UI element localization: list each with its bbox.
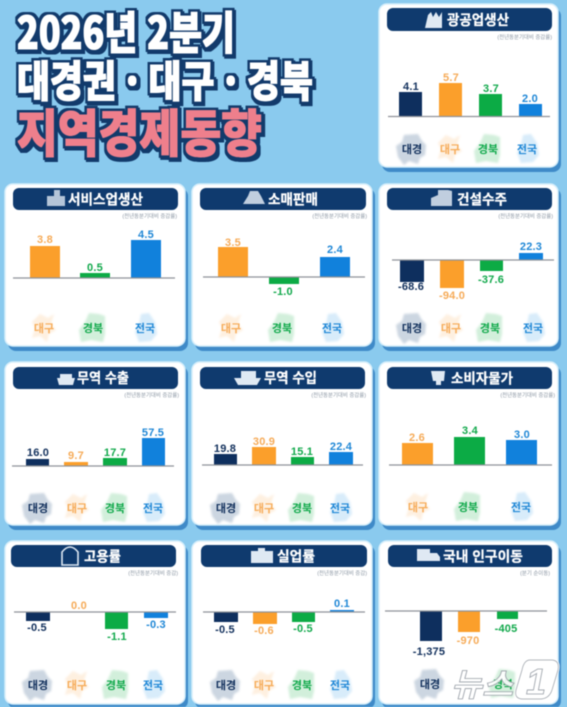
heading: 소비자물가 — [387, 367, 552, 389]
bar chart — [389, 425, 552, 465]
region labels: 대경 — [216, 677, 236, 693]
region labels: 경북 — [106, 677, 126, 693]
heading: 실업률: 실업률 — [277, 546, 315, 566]
region labels — [396, 134, 539, 165]
region labels — [396, 313, 545, 344]
bar chart — [385, 611, 547, 658]
region labels: 경북 — [458, 499, 478, 515]
bar chart: 3.5 — [225, 237, 241, 249]
panel: 소비자물가 — [379, 362, 561, 530]
region labels: 대구 — [441, 320, 461, 336]
bar chart: 3.7 — [483, 83, 499, 95]
bar chart: 3.4 — [462, 425, 479, 437]
basis note: (전년동분기대비 증감률) — [124, 391, 179, 399]
heading: 서비스업생산: 서비스업생산 — [68, 190, 143, 210]
region labels: 대구 — [221, 320, 241, 336]
heading: 고용률: 고용률 — [84, 546, 121, 566]
bar chart: -0.5 — [215, 624, 235, 636]
bar chart: 17.7 — [104, 447, 126, 459]
watermark: 뉴스1 — [451, 660, 558, 703]
region labels — [414, 669, 515, 700]
heading: 실업률 — [201, 545, 367, 567]
region labels — [210, 493, 352, 524]
region labels — [22, 493, 165, 524]
bar chart: 4.5 — [138, 229, 154, 241]
bar chart: -0.5 — [27, 622, 47, 634]
bar chart: -0.5 — [293, 623, 313, 635]
panel: 소매판매 — [192, 184, 375, 351]
basis note: (전년동분기대비 증감률) — [498, 212, 553, 220]
region labels: 전국 — [330, 677, 350, 693]
bar chart: 19.8 — [214, 443, 236, 455]
bar chart: 9.7 — [68, 450, 84, 462]
heading: 고용률 — [11, 545, 176, 567]
bar chart: 15.1 — [291, 446, 313, 458]
title: 지역경제동향 — [17, 93, 262, 167]
bar chart: -94.0 — [439, 290, 465, 302]
bar chart — [203, 237, 365, 298]
region labels: 경북 — [292, 500, 312, 516]
heading: 무역 수입: 무역 수입 — [264, 368, 317, 388]
region labels: 전국 — [511, 499, 531, 515]
bar chart — [203, 598, 365, 637]
region labels: 경북 — [272, 320, 292, 336]
region labels: 전국 — [322, 320, 342, 336]
bar chart: 30.9 — [253, 436, 275, 448]
bar chart: -970 — [457, 635, 479, 647]
basis note: (전년동분기대비 증감) — [128, 569, 178, 577]
region labels: 대경 — [420, 676, 440, 692]
basis note: (분기 순이동) — [520, 569, 550, 577]
region labels: 대경 — [216, 500, 236, 516]
region labels: 경북 — [480, 320, 500, 336]
region labels — [219, 313, 344, 342]
bar chart: 2.6 — [409, 432, 425, 444]
watermark: 뉴스1: 1 — [526, 661, 546, 702]
panel: 국내 인구이동 — [379, 541, 561, 707]
region labels: 대경 — [28, 677, 48, 693]
bar chart: -1.0 — [273, 286, 293, 298]
bar chart: 2.0 — [522, 93, 538, 105]
region labels: 대경 — [28, 500, 48, 516]
region labels: 전국 — [330, 500, 350, 516]
region labels: 경북 — [493, 676, 513, 692]
bar chart: 5.7 — [443, 72, 459, 84]
region labels: 대구 — [254, 500, 274, 516]
region labels: 전국 — [517, 141, 537, 157]
region labels — [210, 670, 352, 701]
title: 대경권 · 대구 · 경북 — [17, 48, 313, 110]
region labels: 경북 — [292, 677, 312, 693]
basis note: (전년동분기대비 증감률) — [497, 33, 552, 41]
heading: 소매판매: 소매판매 — [268, 190, 318, 210]
bar chart: -0.3 — [146, 619, 166, 631]
heading: 무역 수출: 무역 수출 — [77, 368, 129, 388]
region labels: 대구 — [34, 320, 54, 336]
region labels: 대구 — [67, 500, 87, 516]
panel: 무역 수출 — [5, 362, 188, 530]
bar chart — [12, 427, 174, 466]
panel: 서비스업생산 — [5, 184, 188, 351]
heading: 건설수주: 건설수주 — [457, 190, 507, 210]
region labels: 전국 — [143, 677, 163, 693]
bar chart — [14, 600, 176, 643]
bar chart: 0.0 — [71, 600, 87, 612]
watermark: 뉴스1: 뉴스 — [451, 667, 515, 703]
region labels: 대경 — [402, 320, 422, 336]
bar chart: 16.0 — [27, 447, 49, 459]
bar chart: 0.1 — [334, 598, 350, 610]
title — [17, 0, 313, 167]
bar chart — [202, 436, 363, 465]
region labels: 대구 — [408, 499, 428, 515]
bar chart: -1,375 — [413, 646, 445, 658]
region labels: 경북 — [83, 320, 103, 336]
heading: 국내 인구이동: 국내 인구이동 — [443, 546, 523, 566]
region labels: 전국 — [143, 500, 163, 516]
region labels: 경북 — [478, 141, 498, 157]
panel: 고용률 — [5, 541, 188, 707]
region labels — [32, 313, 157, 342]
region labels: 대구 — [67, 677, 87, 693]
heading: 무역 수입 — [200, 367, 365, 389]
heading: 서비스업생산 — [13, 188, 178, 210]
panel: 실업률 — [192, 541, 375, 707]
heading: 소비자물가: 소비자물가 — [451, 368, 513, 388]
bar chart: 57.5 — [142, 427, 164, 439]
region labels — [406, 492, 533, 521]
basis note: (전년동분기대비 증감) — [317, 569, 367, 577]
bar chart: -405 — [495, 623, 517, 635]
bar chart: -1.1 — [107, 631, 127, 643]
panel: 무역 수입 — [192, 362, 375, 530]
heading: 광공업생산: 광공업생산 — [447, 10, 509, 30]
bar chart: 22.4 — [330, 441, 353, 453]
region labels: 대구 — [254, 677, 274, 693]
region labels: 대경 — [402, 141, 422, 157]
heading: 소매판매 — [200, 188, 366, 210]
panel: 광공업생산 — [379, 4, 561, 172]
region labels: 경북 — [105, 500, 125, 516]
panel: 건설수주 — [379, 184, 561, 351]
bar chart: 22.3 — [520, 241, 542, 253]
region labels: 전국 — [523, 320, 543, 336]
region labels: 전국 — [135, 320, 155, 336]
heading: 광공업생산 — [387, 8, 552, 31]
basis note: (전년동분기대비 증감률) — [312, 212, 367, 220]
bar chart — [388, 72, 550, 116]
heading: 국내 인구이동 — [388, 545, 552, 567]
region labels — [22, 670, 165, 701]
bar chart: 3.0 — [514, 429, 530, 441]
region labels: 대구 — [440, 141, 460, 157]
basis note: (전년동분기대비 증감률) — [311, 391, 366, 399]
bar chart — [392, 241, 554, 302]
bar chart: -0.6 — [254, 625, 274, 637]
bar chart: 0.5 — [87, 262, 103, 274]
bar chart: 4.1 — [403, 81, 419, 93]
bar chart: -37.6 — [478, 274, 504, 286]
bar chart: 2.4 — [327, 244, 344, 256]
bar chart: -68.6 — [398, 281, 424, 293]
heading: 건설수주 — [387, 188, 552, 210]
bar chart: 3.8 — [37, 234, 53, 246]
basis note: (전년동분기대비 증감률) — [122, 212, 177, 220]
basis note: (전년동분기대비 증감률) — [500, 391, 555, 399]
heading: 무역 수출 — [13, 367, 178, 389]
bar chart — [13, 229, 175, 278]
